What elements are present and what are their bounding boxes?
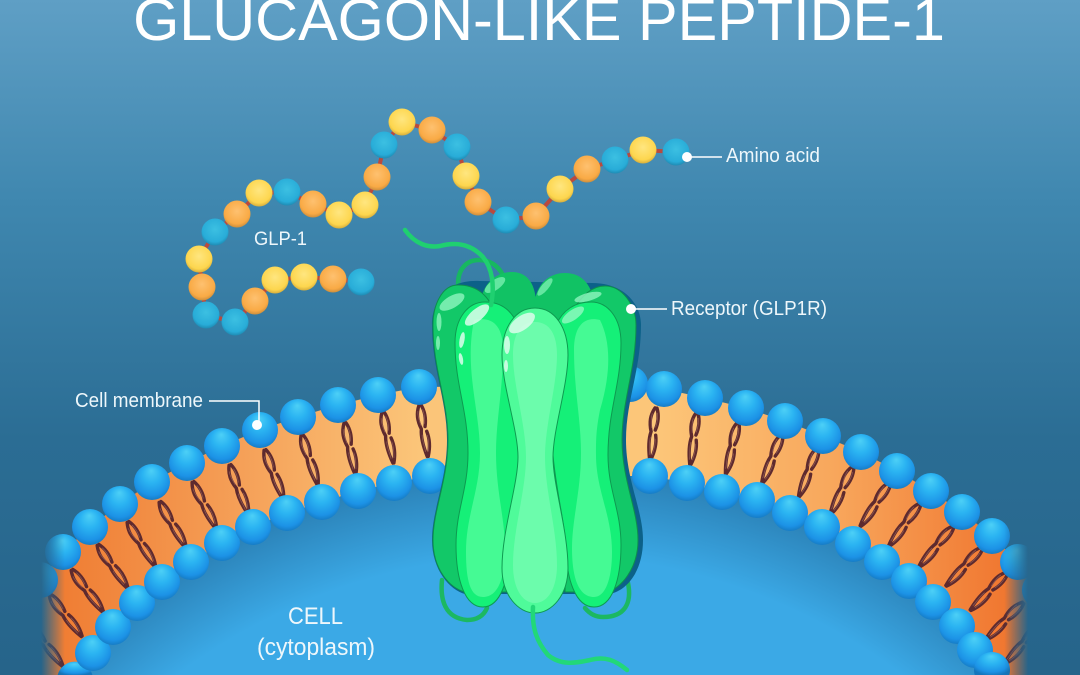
receptor shadow xyxy=(432,281,643,594)
label: CELL (cytoplasm): (cytoplasm) xyxy=(257,634,375,661)
label: GLP-1: GLP-1 xyxy=(254,229,307,250)
label: Amino acid xyxy=(682,144,820,167)
GLP1R receptor xyxy=(405,230,643,670)
back helix highlights xyxy=(482,274,555,298)
label: Amino acid: Amino acid xyxy=(726,144,820,167)
center helix core xyxy=(513,322,557,603)
middle right helix xyxy=(553,302,621,607)
extracellular loop xyxy=(458,260,503,292)
middle left helix xyxy=(455,302,520,607)
GLP-1 amino acid chain xyxy=(186,108,690,336)
intracellular loops xyxy=(442,580,629,620)
center helix xyxy=(502,308,568,613)
label: Cell membrane: Cell membrane xyxy=(75,389,203,412)
C-terminal tail xyxy=(533,607,627,670)
label: Cell membrane xyxy=(75,389,262,430)
middle left helix core xyxy=(466,319,505,597)
lipid tails xyxy=(27,404,1043,669)
N-terminal tail xyxy=(405,230,493,305)
label: CELL (cytoplasm): CELL xyxy=(288,603,343,630)
helix highlights xyxy=(458,301,587,372)
outer helix highlights xyxy=(436,290,603,350)
back helices xyxy=(480,272,594,340)
lower lipid heads xyxy=(58,458,1010,675)
upper lipid heads xyxy=(22,366,1058,608)
label: CELL (cytoplasm) xyxy=(257,603,375,661)
outer left helix xyxy=(433,285,510,592)
cell membrane and cytoplasm xyxy=(22,366,1058,675)
middle right helix core xyxy=(572,319,612,597)
lipid bilayer band xyxy=(30,385,1040,675)
label: Receptor (GLP1R): Receptor (GLP1R) xyxy=(671,297,827,320)
outer right helix xyxy=(565,286,638,592)
cytoplasm xyxy=(90,476,975,675)
